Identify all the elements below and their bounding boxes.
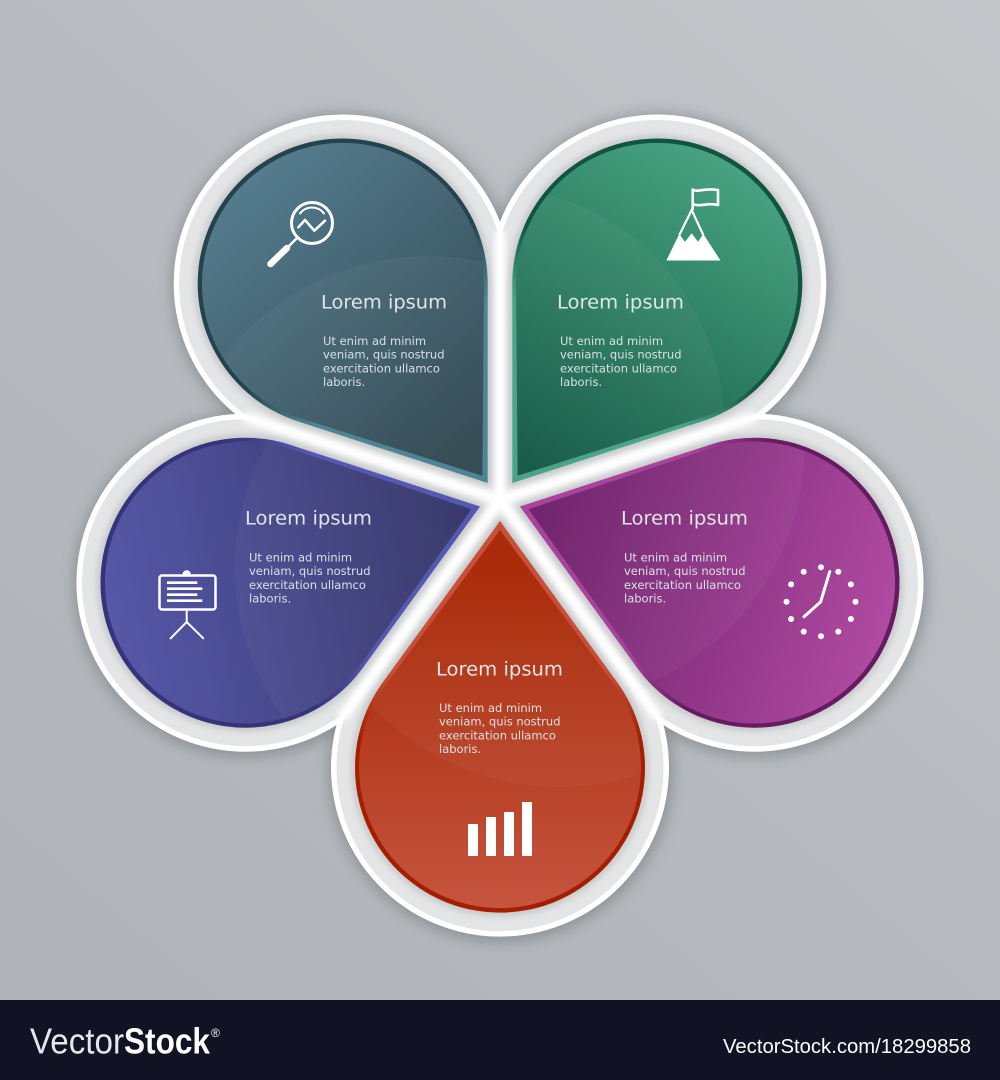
logo mark: registered: ® (211, 1026, 220, 1040)
text block: purple: exercitation ullamco (624, 578, 741, 592)
text block: teal: veniam, quis nostrud (323, 348, 444, 362)
logo: Vector: Vector (30, 1020, 124, 1062)
text block: green (560, 334, 682, 389)
text block: purple: Ut enim ad minim (624, 550, 727, 564)
text block: teal: exercitation ullamco (323, 361, 440, 375)
text block: blue: laboris. (249, 592, 291, 606)
text block: green: veniam, quis nostrud (560, 348, 682, 362)
heading: teal: Lorem ipsum (321, 292, 447, 314)
logo: Stock: Stock (124, 1020, 211, 1062)
panel: green petal (512, 138, 802, 483)
text block: blue (249, 550, 370, 606)
text block: teal (323, 334, 444, 389)
icon: bar chart (468, 802, 532, 856)
icon: clock (784, 564, 858, 639)
text block: blue: Ut enim ad minim (249, 550, 352, 564)
text block: green: Ut enim ad minim (560, 334, 663, 348)
text block: teal: Ut enim ad minim (323, 334, 426, 348)
text block: purple (624, 550, 746, 606)
text block: purple: laboris. (624, 592, 666, 606)
heading: blue: Lorem ipsum (245, 508, 372, 530)
text block: red: Ut enim ad minim (439, 701, 542, 715)
heading: red: Lorem ipsum (436, 660, 563, 680)
panel: red petal (301, 269, 819, 915)
icon: magnifier with chart (270, 202, 332, 264)
panel: teal petal (198, 138, 488, 483)
text block: red: exercitation ullamco (439, 728, 556, 742)
text block: red: laboris. (439, 742, 481, 756)
text block: purple: veniam, quis nostrud (624, 564, 746, 578)
image id: VectorStock.com/18299858 (723, 1036, 971, 1058)
heading: purple: Lorem ipsum (621, 508, 748, 530)
heading: green: Lorem ipsum (557, 292, 684, 314)
text block: blue: exercitation ullamco (249, 578, 366, 592)
icon: presentation board (160, 571, 216, 638)
text block: blue: veniam, quis nostrud (249, 564, 370, 578)
panel: blue petal (100, 438, 480, 728)
panel: purple petal (520, 438, 900, 728)
text block: green: exercitation ullamco (560, 361, 677, 375)
text block: teal: laboris. (323, 375, 365, 389)
footer band (0, 1000, 1000, 1080)
text block: green: laboris. (560, 375, 602, 389)
text block: red (439, 701, 560, 756)
icon: mountain with flag (666, 189, 720, 260)
flower frame (63, 81, 938, 915)
text block: red: veniam, quis nostrud (439, 715, 560, 729)
